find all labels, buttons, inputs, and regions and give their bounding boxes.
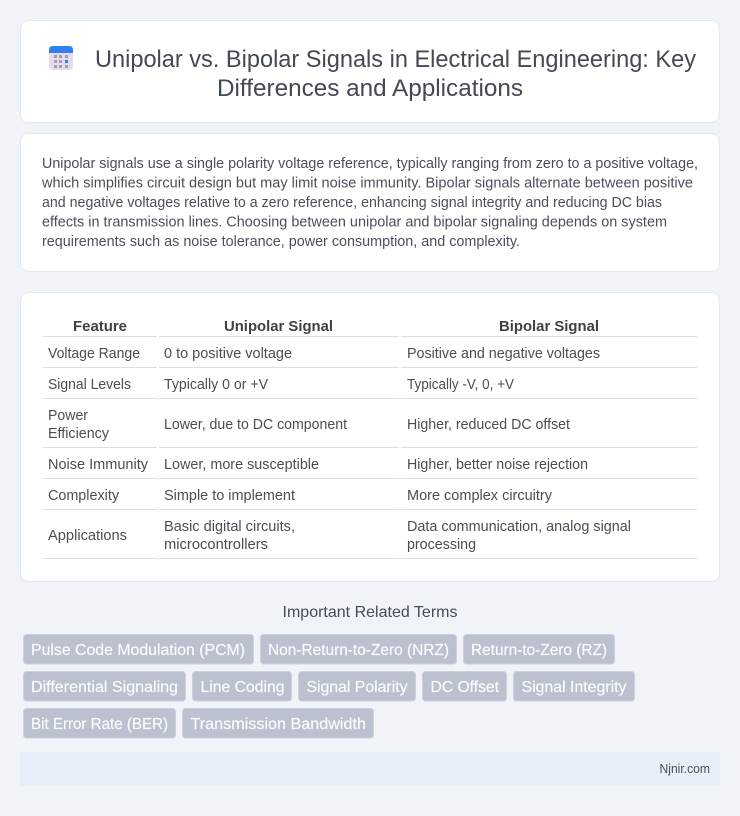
table row: applications: microcontrollers xyxy=(164,537,268,553)
tag: BER xyxy=(24,708,176,738)
tag: PCM xyxy=(24,634,254,664)
text block: summary paragraph: and negative voltages relative to a zero reference, enhancing signal integrity and reducing DC bias xyxy=(42,195,662,211)
tag: NRZ xyxy=(260,634,456,664)
icon: calendar xyxy=(49,46,73,70)
tag: signal polarity xyxy=(298,672,416,701)
table row: signal levels: Typically 0 or +V xyxy=(164,377,268,393)
table row: applications: processing xyxy=(407,537,476,553)
table row: noise immunity: Lower, more susceptible xyxy=(164,457,319,473)
tag: DC offset xyxy=(422,672,506,701)
title: Differences and Applications xyxy=(217,75,523,102)
table header row: Feature xyxy=(73,319,127,335)
table header row xyxy=(73,319,599,335)
table row: applications xyxy=(48,519,631,553)
table row: power efficiency: Efficiency xyxy=(48,426,110,442)
tag: RZ xyxy=(464,634,614,664)
table row: complexity: Complexity xyxy=(48,488,120,504)
title: Unipolar vs. Bipolar Signals in Electrical Engineering: Key xyxy=(95,46,696,73)
text block: summary paragraph: which simplifies circuit design but may limit noise immunity. Bipolar signals alternate between positive xyxy=(41,176,693,192)
tag: signal polarity: Signal Polarity xyxy=(306,679,408,696)
footer bar: Njnir.com xyxy=(660,762,710,776)
table row: voltage range: Voltage Range xyxy=(48,346,140,362)
footer bar xyxy=(20,752,720,786)
table row: signal levels: Typically -V, 0, +V xyxy=(407,377,514,393)
heading: important related terms: Important Related Terms xyxy=(282,604,458,621)
table row: power efficiency: Lower, due to DC component xyxy=(164,417,347,433)
tag: differential signaling: Differential Signaling xyxy=(31,679,178,696)
tag: signal integrity xyxy=(514,672,634,701)
table header row: Bipolar Signal xyxy=(499,319,599,335)
panel: related term tags xyxy=(24,634,634,738)
table row: noise immunity: Higher, better noise rejection xyxy=(407,457,588,473)
tag: differential signaling xyxy=(24,672,186,701)
table row: complexity: More complex circuitry xyxy=(407,488,553,504)
table row: applications: Basic digital circuits, xyxy=(164,519,295,535)
panel: introduction text xyxy=(20,134,720,272)
table row: applications: Data communication, analog signal xyxy=(407,519,631,535)
table row: applications: Applications xyxy=(48,528,127,544)
tag: NRZ: Non-Return-to-Zero (NRZ) xyxy=(268,642,449,659)
tag: DC offset: DC Offset xyxy=(430,679,500,696)
table header row: Unipolar Signal xyxy=(224,319,333,335)
table row: signal levels xyxy=(48,377,514,393)
tag: transmission bandwidth xyxy=(182,708,374,738)
table row: noise immunity xyxy=(48,457,588,473)
title xyxy=(95,46,696,102)
tag: line coding: Line Coding xyxy=(200,679,284,696)
table row: voltage range: 0 to positive voltage xyxy=(164,346,292,362)
table row: power efficiency xyxy=(48,408,570,442)
table row: power efficiency: Higher, reduced DC offset xyxy=(407,417,570,433)
table row: voltage range: Positive and negative voltages xyxy=(407,346,600,362)
tag: PCM: Pulse Code Modulation (PCM) xyxy=(31,642,245,659)
text block: summary paragraph: Unipolar signals use a single polarity voltage reference, typically ranging from zero to a positive voltage, xyxy=(42,156,698,172)
table row: complexity xyxy=(48,488,553,504)
panel: header xyxy=(20,20,720,122)
tag: line coding xyxy=(192,672,292,701)
table row: complexity: Simple to implement xyxy=(164,488,295,504)
tag: BER: Bit Error Rate (BER) xyxy=(31,716,168,733)
text block: summary paragraph: requirements such as noise tolerance, power consumption, and complexity. xyxy=(42,234,520,250)
tag: RZ: Return-to-Zero (RZ) xyxy=(471,642,607,659)
table row: signal levels: Signal Levels xyxy=(48,377,131,393)
text block: summary paragraph: effects in transmission lines. Choosing between unipolar and bipolar signaling depends on system xyxy=(42,214,667,230)
table row: noise immunity: Noise Immunity xyxy=(48,457,149,473)
table row: voltage range xyxy=(48,346,600,362)
tag: signal integrity: Signal Integrity xyxy=(522,679,626,696)
table row: power efficiency: Power xyxy=(48,408,88,424)
tag: transmission bandwidth: Transmission Bandwidth xyxy=(190,716,366,733)
panel: comparison table xyxy=(20,292,720,582)
text block: summary paragraph xyxy=(41,156,698,250)
